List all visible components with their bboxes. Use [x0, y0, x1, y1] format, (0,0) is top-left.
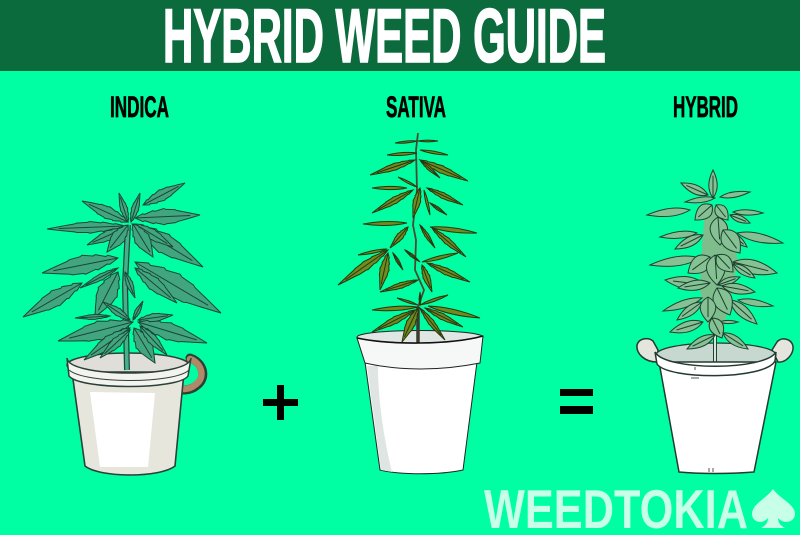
icon: spade: [752, 489, 795, 528]
left pot handle: [637, 339, 658, 362]
pot body: [659, 362, 776, 474]
label: indica: INDICA: [110, 91, 169, 124]
right pot handle: [772, 339, 793, 362]
sativa leaves: [335, 140, 481, 344]
bucket interior: [67, 353, 189, 377]
indica leaves: [19, 178, 227, 367]
indica stem: [125, 225, 128, 370]
header band: [0, 0, 800, 71]
bucket body: [72, 372, 184, 475]
illustration: sativa plant in pot: [335, 133, 483, 474]
pot interior: [357, 330, 483, 344]
operator: plus: [263, 385, 298, 420]
pot body shadow: [367, 366, 392, 472]
icon: bucket handle: [172, 358, 203, 390]
operator: equals: [560, 389, 593, 414]
bucket highlight panel: [90, 392, 155, 467]
label: sativa: SATIVA: [386, 91, 446, 124]
pot body: [365, 362, 477, 474]
pot rim: [357, 336, 483, 369]
hybrid central foliage: [700, 205, 738, 335]
bucket rim: [67, 358, 191, 386]
label: hybrid: HYBRID: [673, 91, 738, 124]
watermark logo: [484, 478, 795, 535]
pot interior: [656, 343, 776, 367]
illustration: hybrid plant in pot: [637, 170, 793, 474]
hybrid leaves: [647, 170, 784, 353]
hybrid stem: [713, 300, 717, 362]
pot detail marks: [691, 367, 713, 472]
pot rim: [655, 352, 776, 376]
sativa stem: [416, 307, 420, 345]
illustration: indica plant in bucket: [19, 178, 227, 475]
